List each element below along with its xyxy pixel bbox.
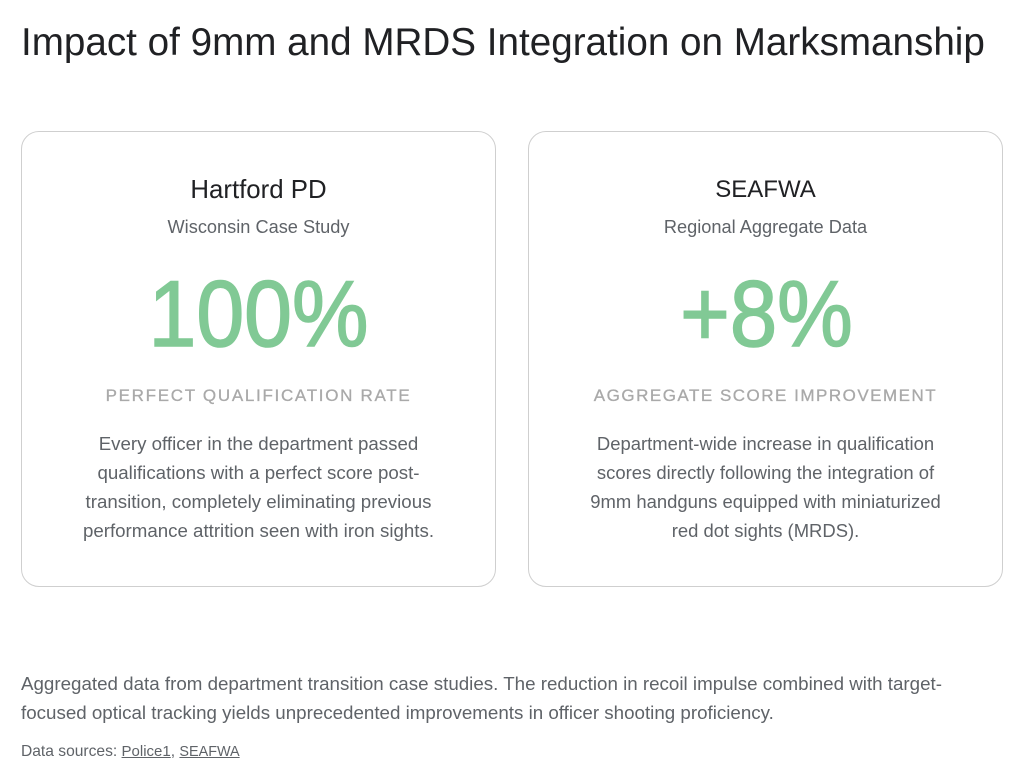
description: Department-wide increase in qualification: [597, 433, 934, 454]
panel subheading: Wisconsin Case Study: [168, 217, 349, 237]
description: scores directly following the integration of: [597, 462, 934, 483]
big stat: +8%: [680, 261, 853, 366]
description: 9mm handguns equipped with miniaturized: [590, 491, 941, 512]
panel subheading: Regional Aggregate Data: [664, 217, 867, 237]
panel: Hartford PD: [21, 131, 496, 587]
description: Every officer in the department passed: [99, 433, 418, 454]
description: qualifications with a perfect score post-: [98, 462, 420, 483]
panel heading: SEAFWA: [715, 176, 816, 203]
summary text: Aggregated data from department transition case studies. The reduction in recoil impulse combined with target-: [21, 673, 942, 694]
panel heading: Hartford PD: [190, 176, 327, 204]
big stat: 100%: [148, 261, 368, 366]
title: Impact of 9mm and MRDS Integration on Marksmanship: [21, 21, 985, 64]
stat label: AGGREGATE SCORE IMPROVEMENT: [594, 386, 937, 405]
description: red dot sights (MRDS).: [672, 520, 859, 541]
description: performance attrition seen with iron sights.: [83, 520, 434, 541]
panel: SEAFWA: [528, 131, 1003, 587]
description: [83, 433, 434, 541]
description: [590, 433, 941, 541]
stat label: PERFECT QUALIFICATION RATE: [106, 386, 411, 405]
data sources: Data sources: Police1, SEAFWA: [21, 743, 240, 760]
description: transition, completely eliminating previous: [86, 491, 431, 512]
summary text: [21, 673, 942, 723]
summary text: focused optical tracking yields unprecedented improvements in officer shooting proficiency.: [21, 702, 774, 723]
